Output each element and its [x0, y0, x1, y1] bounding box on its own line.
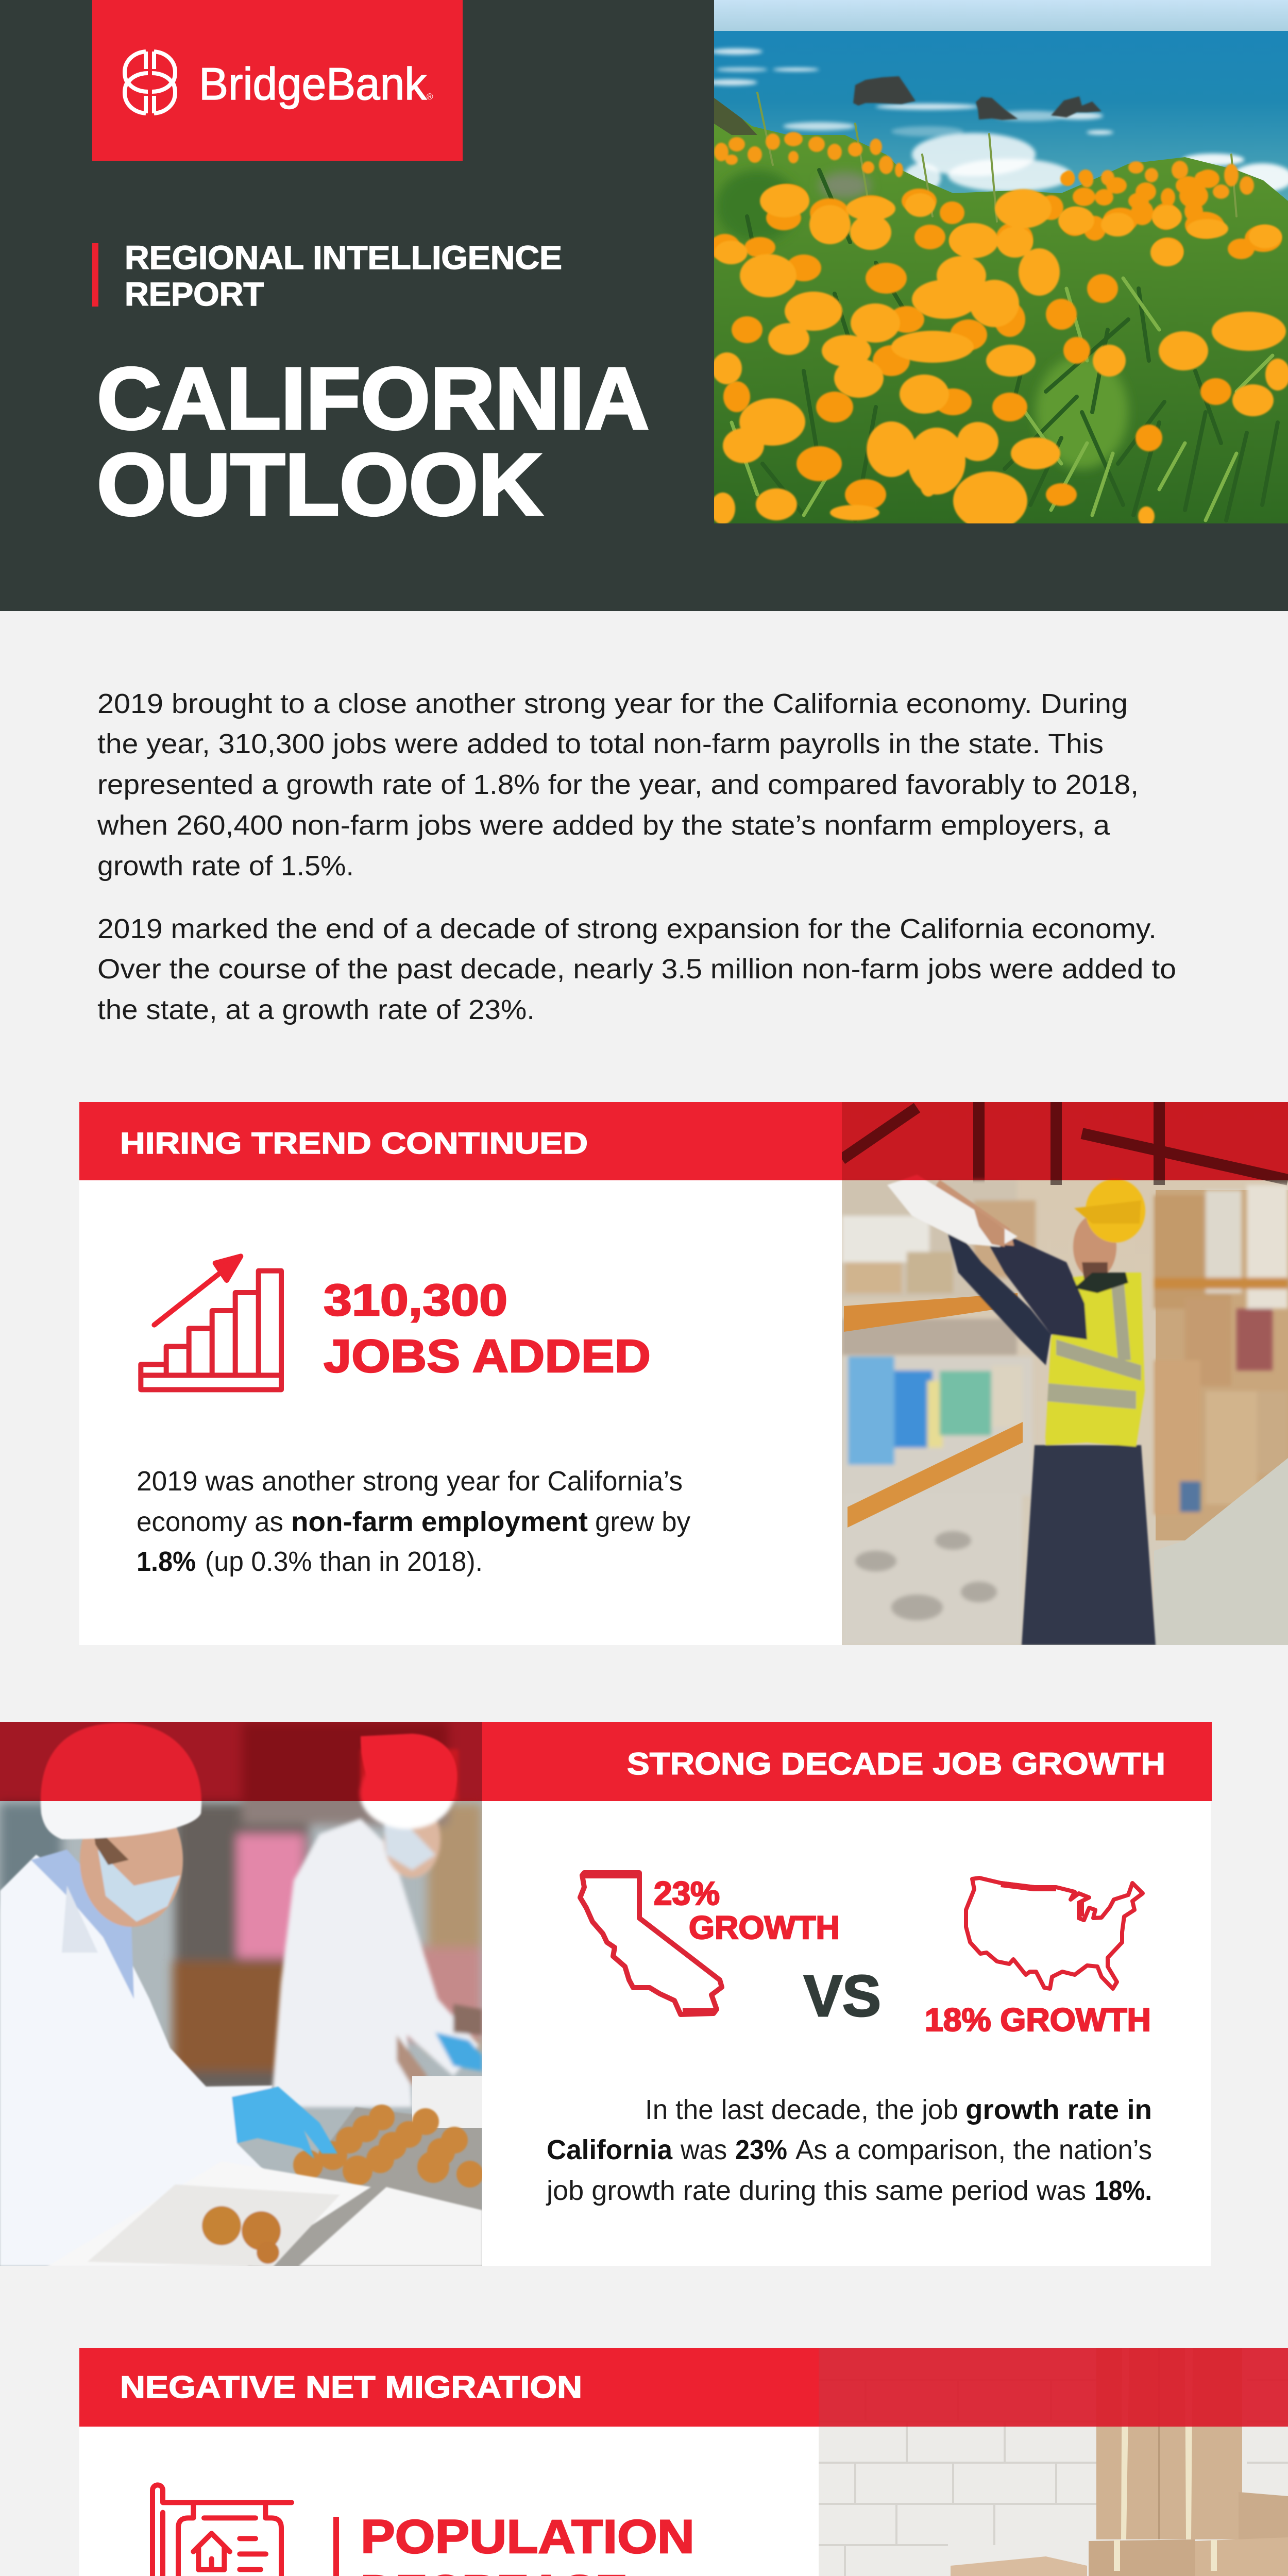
logo block — [92, 0, 463, 161]
body text: As a comparison, the nation’s — [795, 2134, 1152, 2165]
intro text: 2019 marked the end of a decade of strong expansion for the California economy. — [97, 913, 1157, 944]
body text: (up 0.3% than in 2018). — [205, 1546, 483, 1577]
body text: 2019 was another strong year for California’s — [137, 1466, 683, 1497]
body text: economy as — [137, 1506, 283, 1537]
body text: job growth rate during this same period was — [546, 2175, 1086, 2206]
intro text: when 260,400 non-farm jobs were added by the state’s nonfarm employers, a — [97, 810, 1110, 841]
title: OUTLOOK — [97, 436, 543, 534]
subtitle: REGIONAL INTELLIGENCE — [125, 239, 562, 276]
icon: down arrow — [328, 2517, 344, 2576]
icon: Bridge Bank symbol — [125, 52, 175, 113]
body text: 23% — [735, 2134, 787, 2165]
stat: jobs added: 310,300 — [324, 1276, 507, 1325]
body text: 18%. — [1094, 2175, 1152, 2206]
stat: national growth: 18% GROWTH — [925, 2002, 1151, 2038]
boxes — [1096, 2348, 1242, 2539]
body text: non-farm employment — [291, 1506, 588, 1537]
red header overlay — [0, 1722, 482, 1801]
photo: warehouse worker — [842, 1102, 1288, 1645]
blue glove — [232, 2087, 337, 2159]
intro text — [97, 688, 1176, 1025]
poppy stems and leaves — [732, 93, 1278, 520]
icon: California outline — [580, 1873, 722, 2014]
large poppies — [709, 170, 1282, 510]
stat: California growth: GROWTH — [689, 1910, 840, 1946]
header bar — [79, 1102, 842, 1180]
body text: was — [680, 2134, 727, 2165]
icon: house for sale sign — [142, 2485, 292, 2576]
worker — [887, 1175, 1156, 1645]
stat: California growth: 23% — [654, 1875, 720, 1912]
red header overlay — [842, 1102, 1288, 1180]
panel: page header — [0, 0, 1288, 611]
stat: population decrease: POPULATION — [361, 2511, 694, 2563]
red header overlay — [819, 2348, 1288, 2427]
subtitle — [125, 239, 562, 313]
accent bar — [92, 243, 98, 307]
woman worker — [271, 1749, 482, 2107]
panel: negative net migration — [79, 2348, 1288, 2576]
intro text: the state, at a growth rate of 23%. — [97, 994, 535, 1025]
intro text: the year, 310,300 jobs were added to total non-farm payrolls in the state. This — [97, 728, 1104, 759]
body text: growth rate in — [965, 2094, 1152, 2125]
intro text: represented a growth rate of 1.8% for the year, and compared favorably to 2018, — [97, 769, 1139, 800]
panel: hiring trend — [79, 1102, 1288, 1645]
stat: jobs added — [324, 1276, 651, 1382]
distant poppies — [714, 132, 1254, 199]
title: CALIFORNIA — [97, 350, 649, 448]
subtitle: REPORT — [125, 276, 264, 313]
white box — [46, 2161, 482, 2267]
stat: California growth — [654, 1875, 840, 1946]
intro text: Over the course of the past decade, nearly 3.5 million non-farm jobs were added to — [97, 954, 1176, 985]
stat: jobs added: JOBS ADDED — [324, 1331, 651, 1382]
panel: strong decade job growth — [0, 1722, 1212, 2267]
body text: In the last decade, the job — [645, 2094, 958, 2125]
icon: rising bar chart — [141, 1256, 281, 1389]
man worker — [0, 1723, 457, 2266]
left shelving — [842, 1180, 1036, 1645]
title — [97, 350, 649, 534]
icon: United States outline — [966, 1878, 1143, 1989]
tray and muffins — [237, 2107, 482, 2267]
body text: 1.8% — [137, 1546, 196, 1577]
intro text: 2019 brought to a close another strong year for the California economy. During — [97, 688, 1128, 719]
photo: moving boxes against a brick wall — [819, 2348, 1288, 2576]
land — [714, 98, 1288, 523]
body text: California — [547, 2134, 673, 2165]
photo: California poppies above the ocean — [706, 0, 1288, 530]
heading: NEGATIVE NET MIGRATION — [120, 2370, 582, 2404]
header bar — [482, 1722, 1212, 1801]
body text: grew by — [595, 1506, 690, 1537]
heading: STRONG DECADE JOB GROWTH — [627, 1747, 1165, 1781]
logo block: ® — [427, 92, 433, 101]
photo: bakery workers — [0, 1722, 483, 2267]
rocks — [853, 76, 1101, 120]
intro text: growth rate of 1.5%. — [97, 851, 354, 882]
header bar — [79, 2348, 819, 2427]
versus label: VS — [804, 1963, 881, 2028]
body text — [137, 1466, 690, 1577]
logo wordmark: BridgeBank — [199, 58, 427, 109]
heading: HIRING TREND CONTINUED — [120, 1127, 588, 1160]
body text — [546, 2094, 1152, 2206]
